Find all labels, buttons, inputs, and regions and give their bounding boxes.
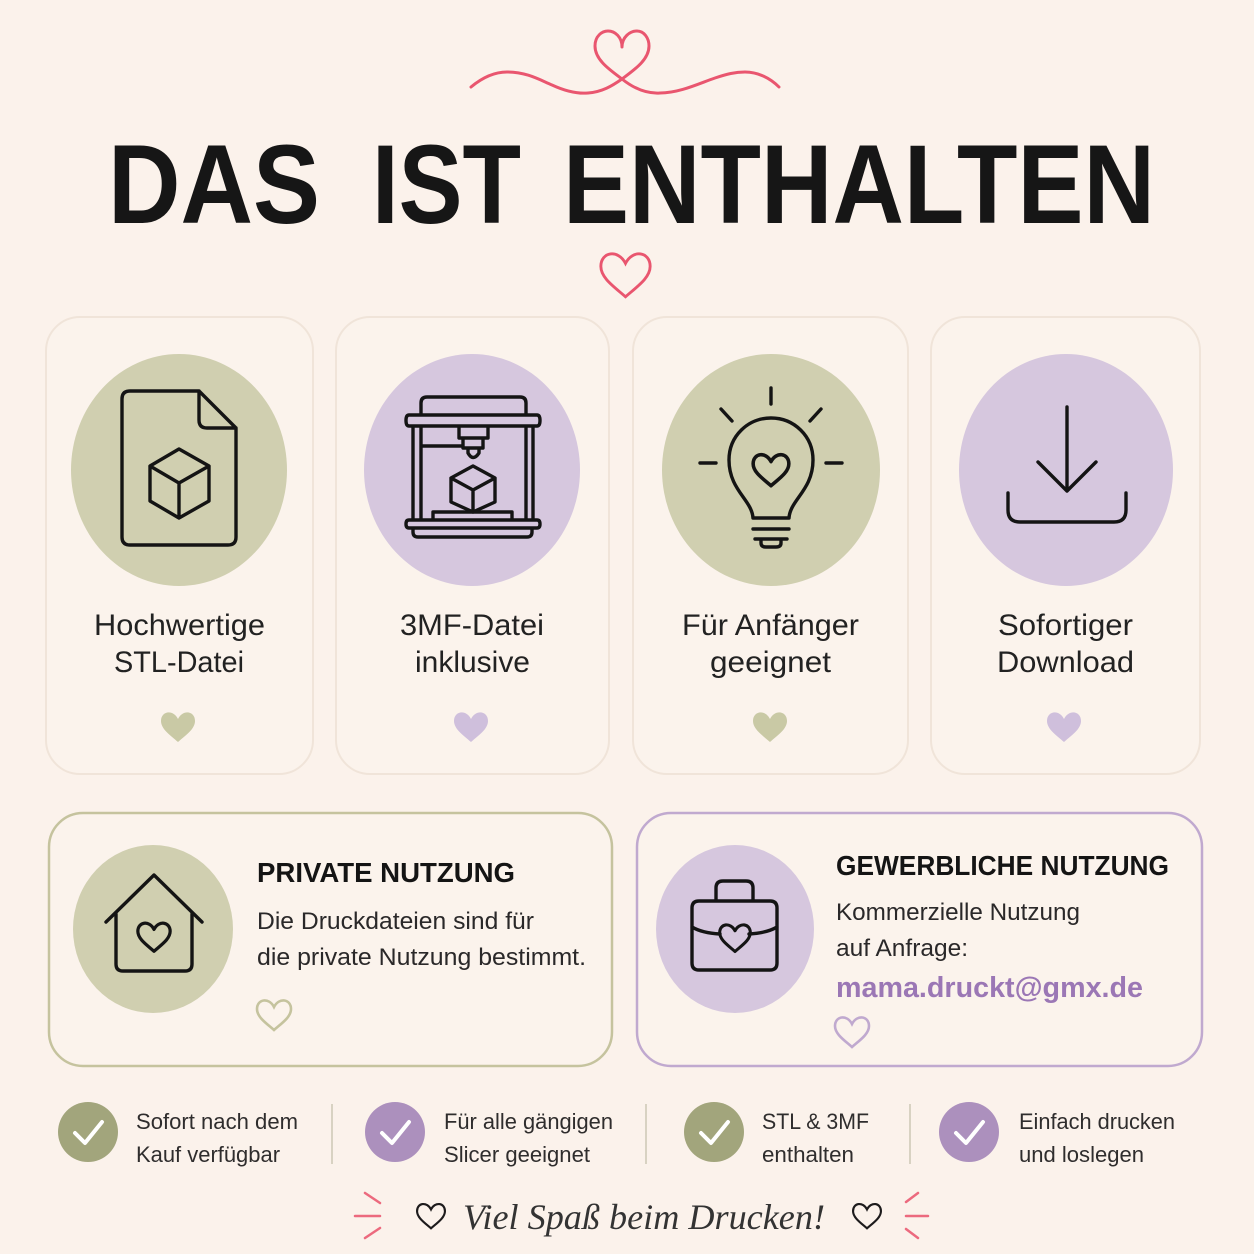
benefit: slicer (365, 1102, 613, 1167)
icon: outline heart (835, 1017, 869, 1047)
body text: Die Druckdateien sind für (257, 908, 534, 935)
text (1019, 1109, 1175, 1167)
label: Für Anfänger (682, 609, 859, 642)
icon: briefcase (656, 845, 814, 1013)
body text: die private Nutzung bestimmt. (257, 944, 586, 971)
title (108, 122, 1155, 247)
panel: beginners (633, 317, 908, 774)
icon: left heart (417, 1204, 445, 1228)
body text: auf Anfrage: (836, 935, 968, 962)
title: ENTHALTEN (563, 122, 1155, 247)
benefit: formats (684, 1102, 869, 1167)
icon: check (365, 1102, 425, 1162)
icon: check (58, 1102, 118, 1162)
label: 3MF-Datei (400, 609, 544, 642)
icon: check (939, 1102, 999, 1162)
icon: heart (454, 712, 488, 742)
label: geeignet (710, 646, 832, 679)
text: enthalten (762, 1142, 854, 1167)
script text: Viel Spaß beim Drucken! (463, 1197, 825, 1237)
label: inklusive (415, 646, 530, 679)
icon: left sparks (355, 1193, 380, 1238)
icon: check (684, 1102, 744, 1162)
label: STL-Datei (114, 646, 244, 679)
label: Download (997, 646, 1134, 679)
icon: light bulb (662, 354, 880, 586)
text (444, 1109, 613, 1167)
label: Hochwertige (94, 609, 265, 642)
label (682, 609, 859, 679)
text (136, 1109, 298, 1167)
icon: right heart (853, 1204, 881, 1228)
panel: private use (49, 813, 612, 1066)
email: mama.druckt@gmx.de (836, 972, 1143, 1004)
heading: PRIVATE NUTZUNG (257, 857, 515, 888)
icon: outline heart (257, 1000, 291, 1030)
text: STL & 3MF (762, 1109, 869, 1134)
icon: file with cube (71, 354, 287, 586)
body text: Kommerzielle Nutzung (836, 899, 1080, 926)
ornament: top heart flourish (471, 31, 779, 93)
title: IST (372, 122, 521, 247)
label (94, 609, 265, 679)
text: Sofort nach dem (136, 1109, 298, 1134)
text: und loslegen (1019, 1142, 1144, 1167)
body text (257, 908, 586, 971)
icon: heart (753, 712, 787, 742)
panel: STL file (46, 317, 313, 774)
text: Slicer geeignet (444, 1142, 590, 1167)
heading: GEWERBLICHE NUTZUNG (836, 850, 1169, 881)
text: Für alle gängigen (444, 1109, 613, 1134)
icon: download (959, 354, 1173, 586)
text (762, 1109, 869, 1167)
panel: download (931, 317, 1200, 774)
text: Einfach drucken (1019, 1109, 1175, 1134)
icon: right sparks (906, 1193, 928, 1238)
text: Kauf verfügbar (136, 1142, 280, 1167)
icon: house (73, 845, 233, 1013)
panel: commercial use (637, 813, 1202, 1066)
title: DAS (108, 122, 320, 247)
icon: heart (1047, 712, 1081, 742)
benefit: easy printing (939, 1102, 1175, 1167)
label (997, 609, 1134, 679)
label (400, 609, 544, 679)
closing message (355, 1193, 928, 1238)
icon: 3D printer (364, 354, 580, 586)
benefit: available immediately (58, 1102, 298, 1167)
body text (836, 899, 1080, 962)
icon: title heart (601, 254, 650, 297)
panel: 3MF file (336, 317, 609, 774)
icon: heart (161, 712, 195, 742)
label: Sofortiger (998, 609, 1133, 642)
